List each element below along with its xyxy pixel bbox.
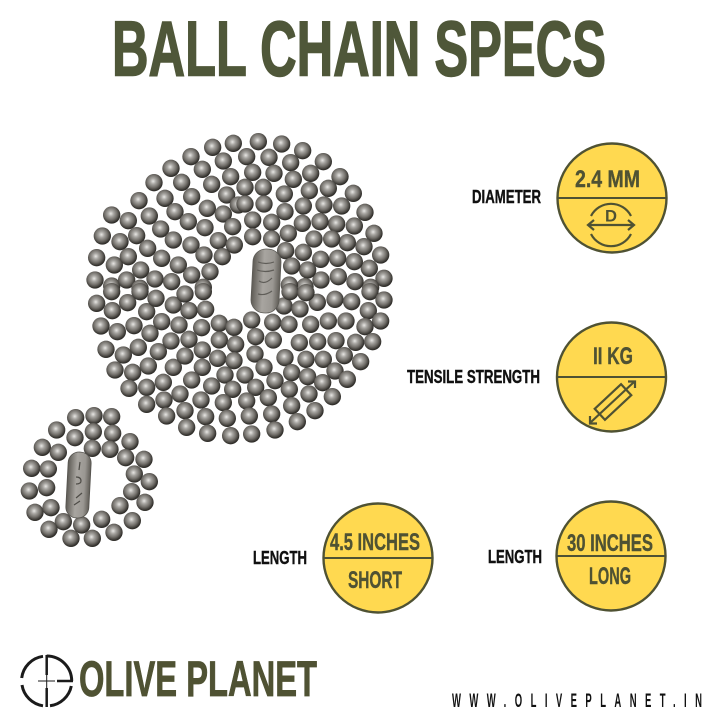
length short label: LENGTH — [253, 548, 307, 568]
icon: tensile test — [590, 382, 635, 424]
length long label: LENGTH — [488, 547, 542, 567]
brand name: OLIVE PLANET — [79, 651, 317, 707]
icon: diameter: D — [605, 206, 617, 226]
website: WWW.OLIVEPLANET.IN — [452, 691, 702, 712]
tensile strength badge — [557, 322, 666, 432]
length long badge — [556, 502, 666, 610]
diameter label: DIAMETER — [472, 187, 541, 207]
clasp of small chain — [65, 451, 92, 519]
length short badge: 4.5 INCHES — [330, 529, 420, 556]
diameter badge — [557, 144, 667, 252]
length short badge — [323, 504, 433, 612]
length long badge: LONG — [589, 563, 631, 590]
diameter badge: 2.4 MM — [575, 166, 640, 193]
tensile strength badge: II KG — [593, 343, 633, 370]
length short badge: SHORT — [348, 567, 402, 594]
length long badge: 30 INCHES — [567, 530, 653, 557]
logo crosshair icon — [22, 655, 73, 707]
tensile strength label: TENSILE STRENGTH — [407, 367, 540, 387]
large coiled ball chain — [86, 133, 393, 444]
clasp of large chain — [250, 248, 282, 314]
small coiled ball chain — [21, 407, 158, 547]
